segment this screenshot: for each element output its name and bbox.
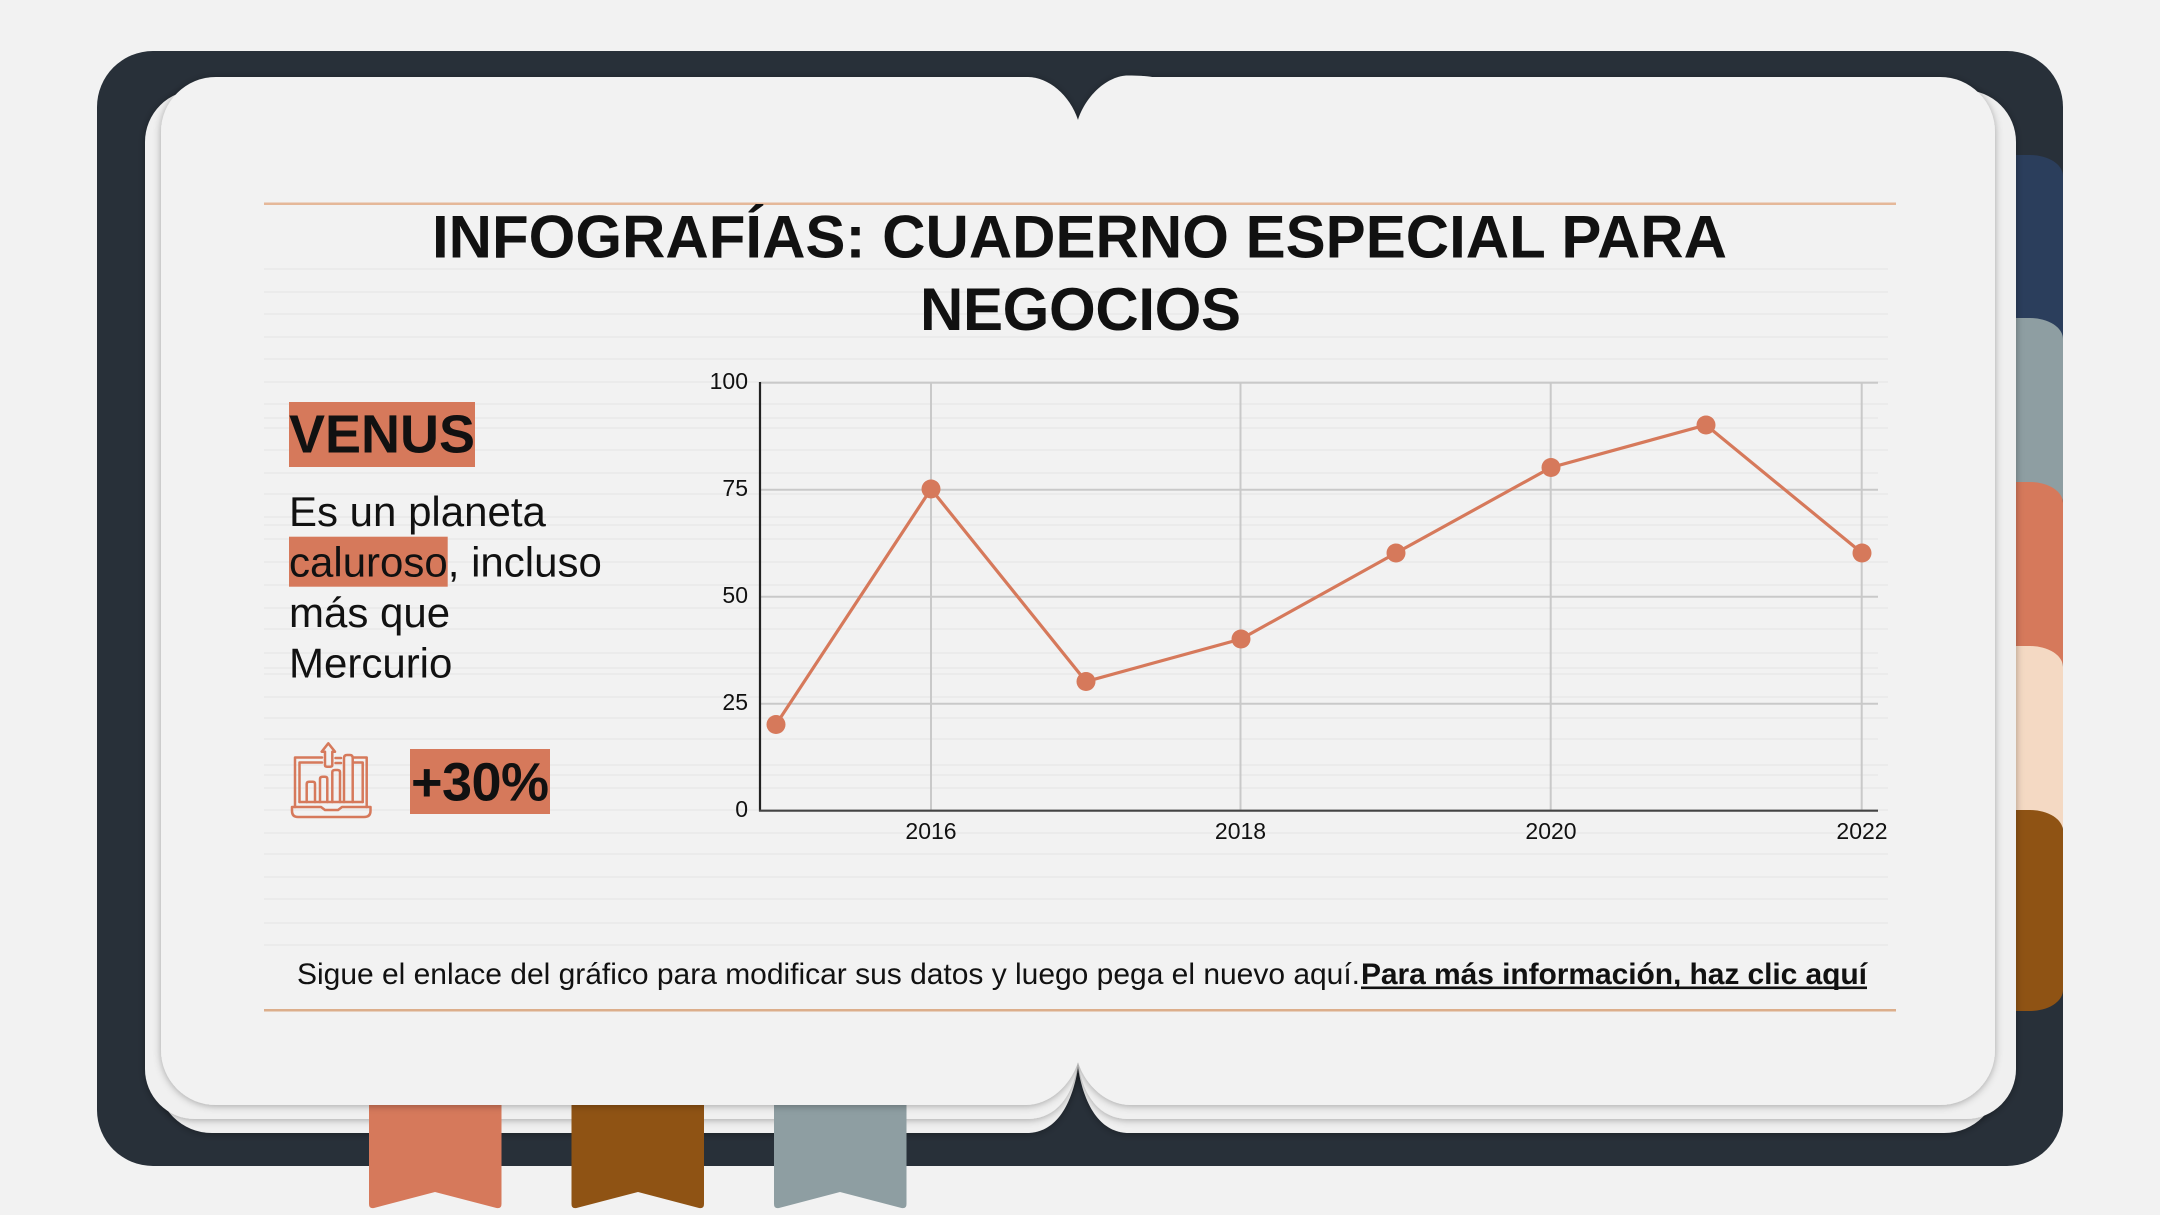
tab: navy xyxy=(1960,155,2063,356)
y axis labels xyxy=(710,368,748,822)
y axis labels: 50 xyxy=(722,582,748,608)
line chart xyxy=(710,368,1888,844)
y axis labels: 0 xyxy=(735,796,748,822)
title: INFOGRAFÍAS: CUADERNO ESPECIAL PARA xyxy=(432,204,1727,270)
bookmark: coral xyxy=(369,1100,502,1208)
middle page layer xyxy=(145,90,2016,1119)
top rule xyxy=(264,202,1896,205)
data line xyxy=(776,425,1862,724)
footer note: Sigue el enlace del gráfico para modificar sus datos y luego pega el nuevo aquí. xyxy=(297,958,1360,991)
description text: más que xyxy=(289,589,450,636)
stat: +30%: +30% xyxy=(411,753,549,813)
x axis labels: 2022 xyxy=(1836,818,1888,844)
bookmark: brown xyxy=(572,1100,704,1208)
icon: laptop with rising bars xyxy=(292,743,370,817)
back page layer xyxy=(157,100,1999,1133)
description text: Es un planeta xyxy=(289,488,547,535)
data points xyxy=(766,416,1872,734)
tab: coral xyxy=(1960,482,2063,683)
description text: Mercurio xyxy=(289,640,452,686)
bookmark: grey xyxy=(774,1100,906,1208)
divider tabs xyxy=(1960,155,2063,1011)
title xyxy=(432,204,1727,343)
bottom rule xyxy=(264,1009,1896,1012)
y axis labels: 25 xyxy=(722,689,748,715)
heading: Venus: VENUS xyxy=(289,405,475,465)
x axis labels: 2018 xyxy=(1215,818,1266,844)
y axis labels: 75 xyxy=(722,475,748,501)
bookmarks xyxy=(369,1100,906,1208)
description text xyxy=(289,488,602,686)
x axis labels xyxy=(905,818,1888,844)
tab: brown xyxy=(1960,810,2063,1011)
top page xyxy=(161,76,1995,1105)
y axis xyxy=(759,382,761,812)
tab: grey xyxy=(1960,318,2063,519)
tab: peach xyxy=(1960,646,2063,847)
footer note: Para más información, haz clic aquí xyxy=(1361,958,1869,991)
footer note xyxy=(297,958,1869,991)
y axis labels: 100 xyxy=(710,368,748,394)
x axis labels: 2016 xyxy=(905,818,957,844)
title: NEGOCIOS xyxy=(920,276,1241,343)
x axis labels: 2020 xyxy=(1525,818,1577,844)
x axis xyxy=(759,810,1878,812)
description text: caluroso, incluso xyxy=(289,538,602,586)
